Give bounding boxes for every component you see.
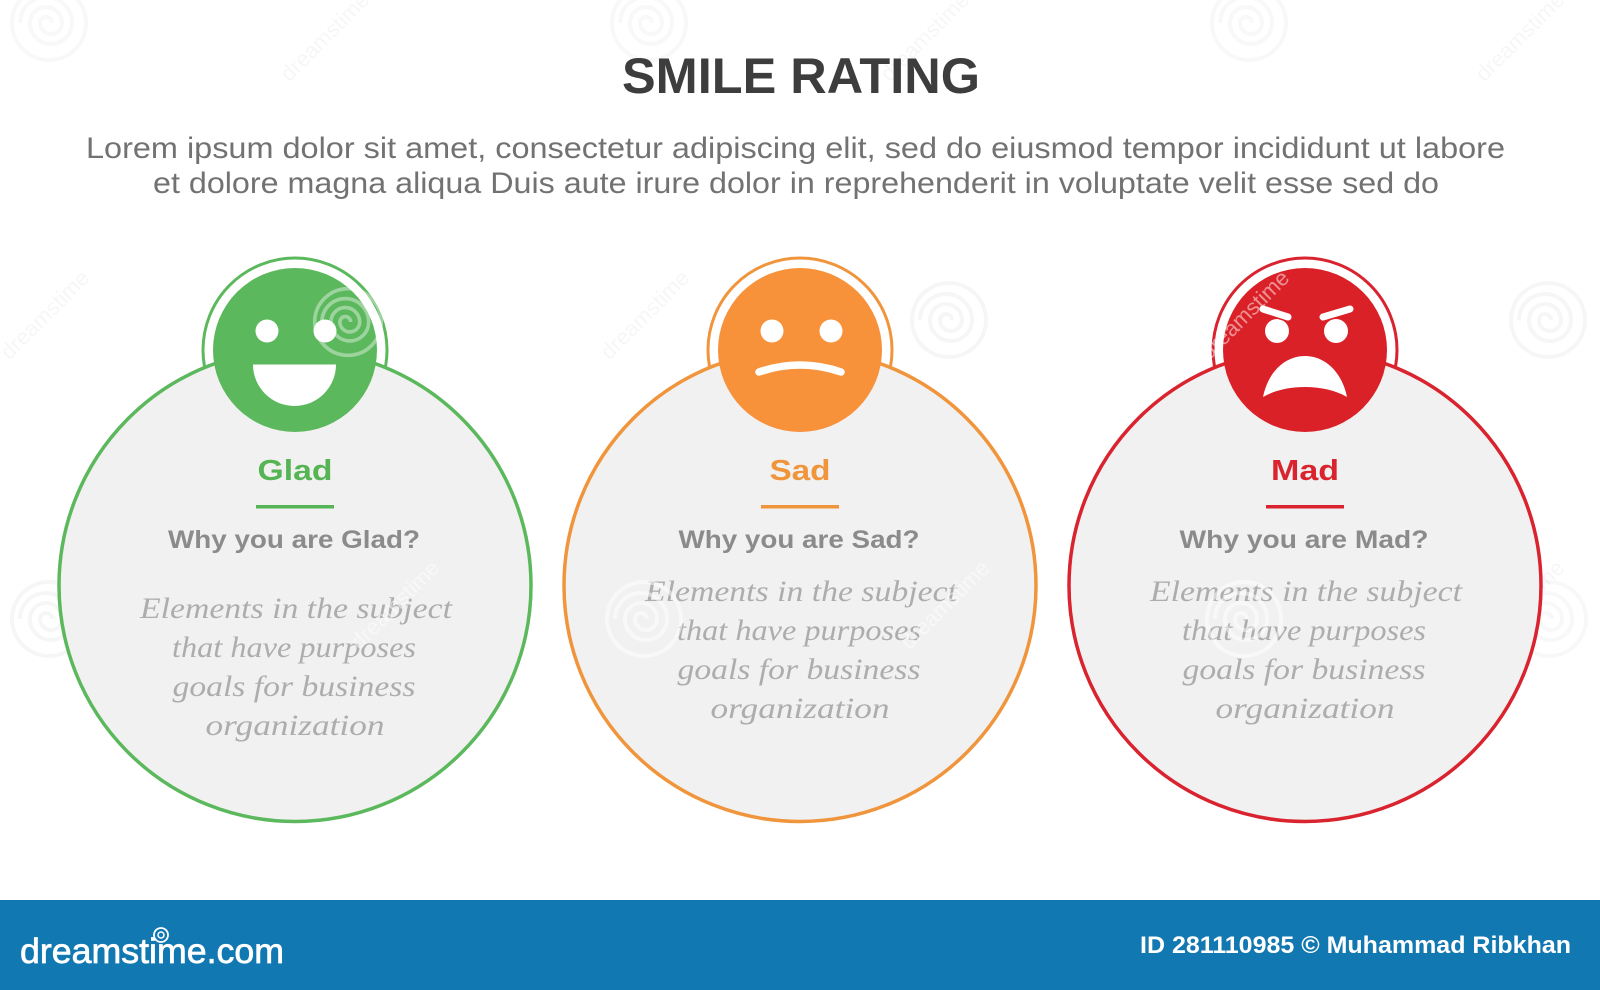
panel: mad: [1069, 258, 1541, 822]
footer logo: dreamstime.com: [20, 932, 284, 971]
text block: sad: that have purposes: [677, 614, 921, 647]
question: glad: Why you are Glad?: [168, 526, 420, 554]
question: sad: Why you are Sad?: [678, 526, 920, 554]
background watermarks: [0, 0, 1586, 656]
heading: mad: Mad: [1271, 455, 1339, 487]
heading: glad: Glad: [258, 455, 332, 487]
text block: sad: [644, 575, 958, 725]
text block: mad: that have purposes: [1182, 614, 1426, 647]
text block: glad: [139, 592, 453, 742]
text block: glad: organization: [206, 709, 384, 742]
heading: sad: Sad: [770, 455, 830, 487]
question: mad: Why you are Mad?: [1180, 526, 1428, 554]
overlay watermarks on panels: dreamstime: [895, 555, 994, 654]
background watermarks: dreamstime: [1470, 555, 1569, 654]
text block: glad: goals for business: [172, 670, 416, 703]
subtitle text block: [86, 132, 1505, 200]
icon: glad face: [213, 268, 381, 432]
subtitle text block: et dolore magna aliqua Duis aute irure dolor in reprehenderit in voluptate velit esse sed do: [153, 167, 1439, 200]
footer credit: ID 281110985 © Muhammad Ribkhan: [1140, 932, 1571, 959]
overlay watermarks on panels: dreamstime: [345, 555, 444, 654]
text block: glad: Elements in the subject: [139, 592, 453, 625]
text block: mad: [1149, 575, 1463, 725]
text block: mad: Elements in the subject: [1149, 575, 1463, 608]
text block: mad: organization: [1216, 692, 1394, 725]
panel: sad: [564, 258, 1036, 822]
text block: sad: goals for business: [678, 653, 920, 686]
footer bar: [0, 900, 1600, 990]
text block: mad: goals for business: [1182, 653, 1426, 686]
text block: sad: Elements in the subject: [644, 575, 958, 608]
overlay watermarks on panels: [345, 265, 1294, 656]
background watermarks: dreamstime: [595, 265, 694, 364]
text block: glad: that have purposes: [172, 631, 416, 664]
overlay watermarks on panels: dreamstime: [1195, 265, 1294, 364]
icon: sad face: [718, 268, 882, 432]
icon: mad face: [1223, 268, 1387, 432]
panel: glad: [59, 258, 531, 822]
title: SMILE RATING: [622, 48, 980, 104]
subtitle text block: Lorem ipsum dolor sit amet, consectetur adipiscing elit, sed do eiusmod tempor incididunt ut labore: [86, 132, 1505, 165]
text block: sad: organization: [710, 692, 890, 725]
